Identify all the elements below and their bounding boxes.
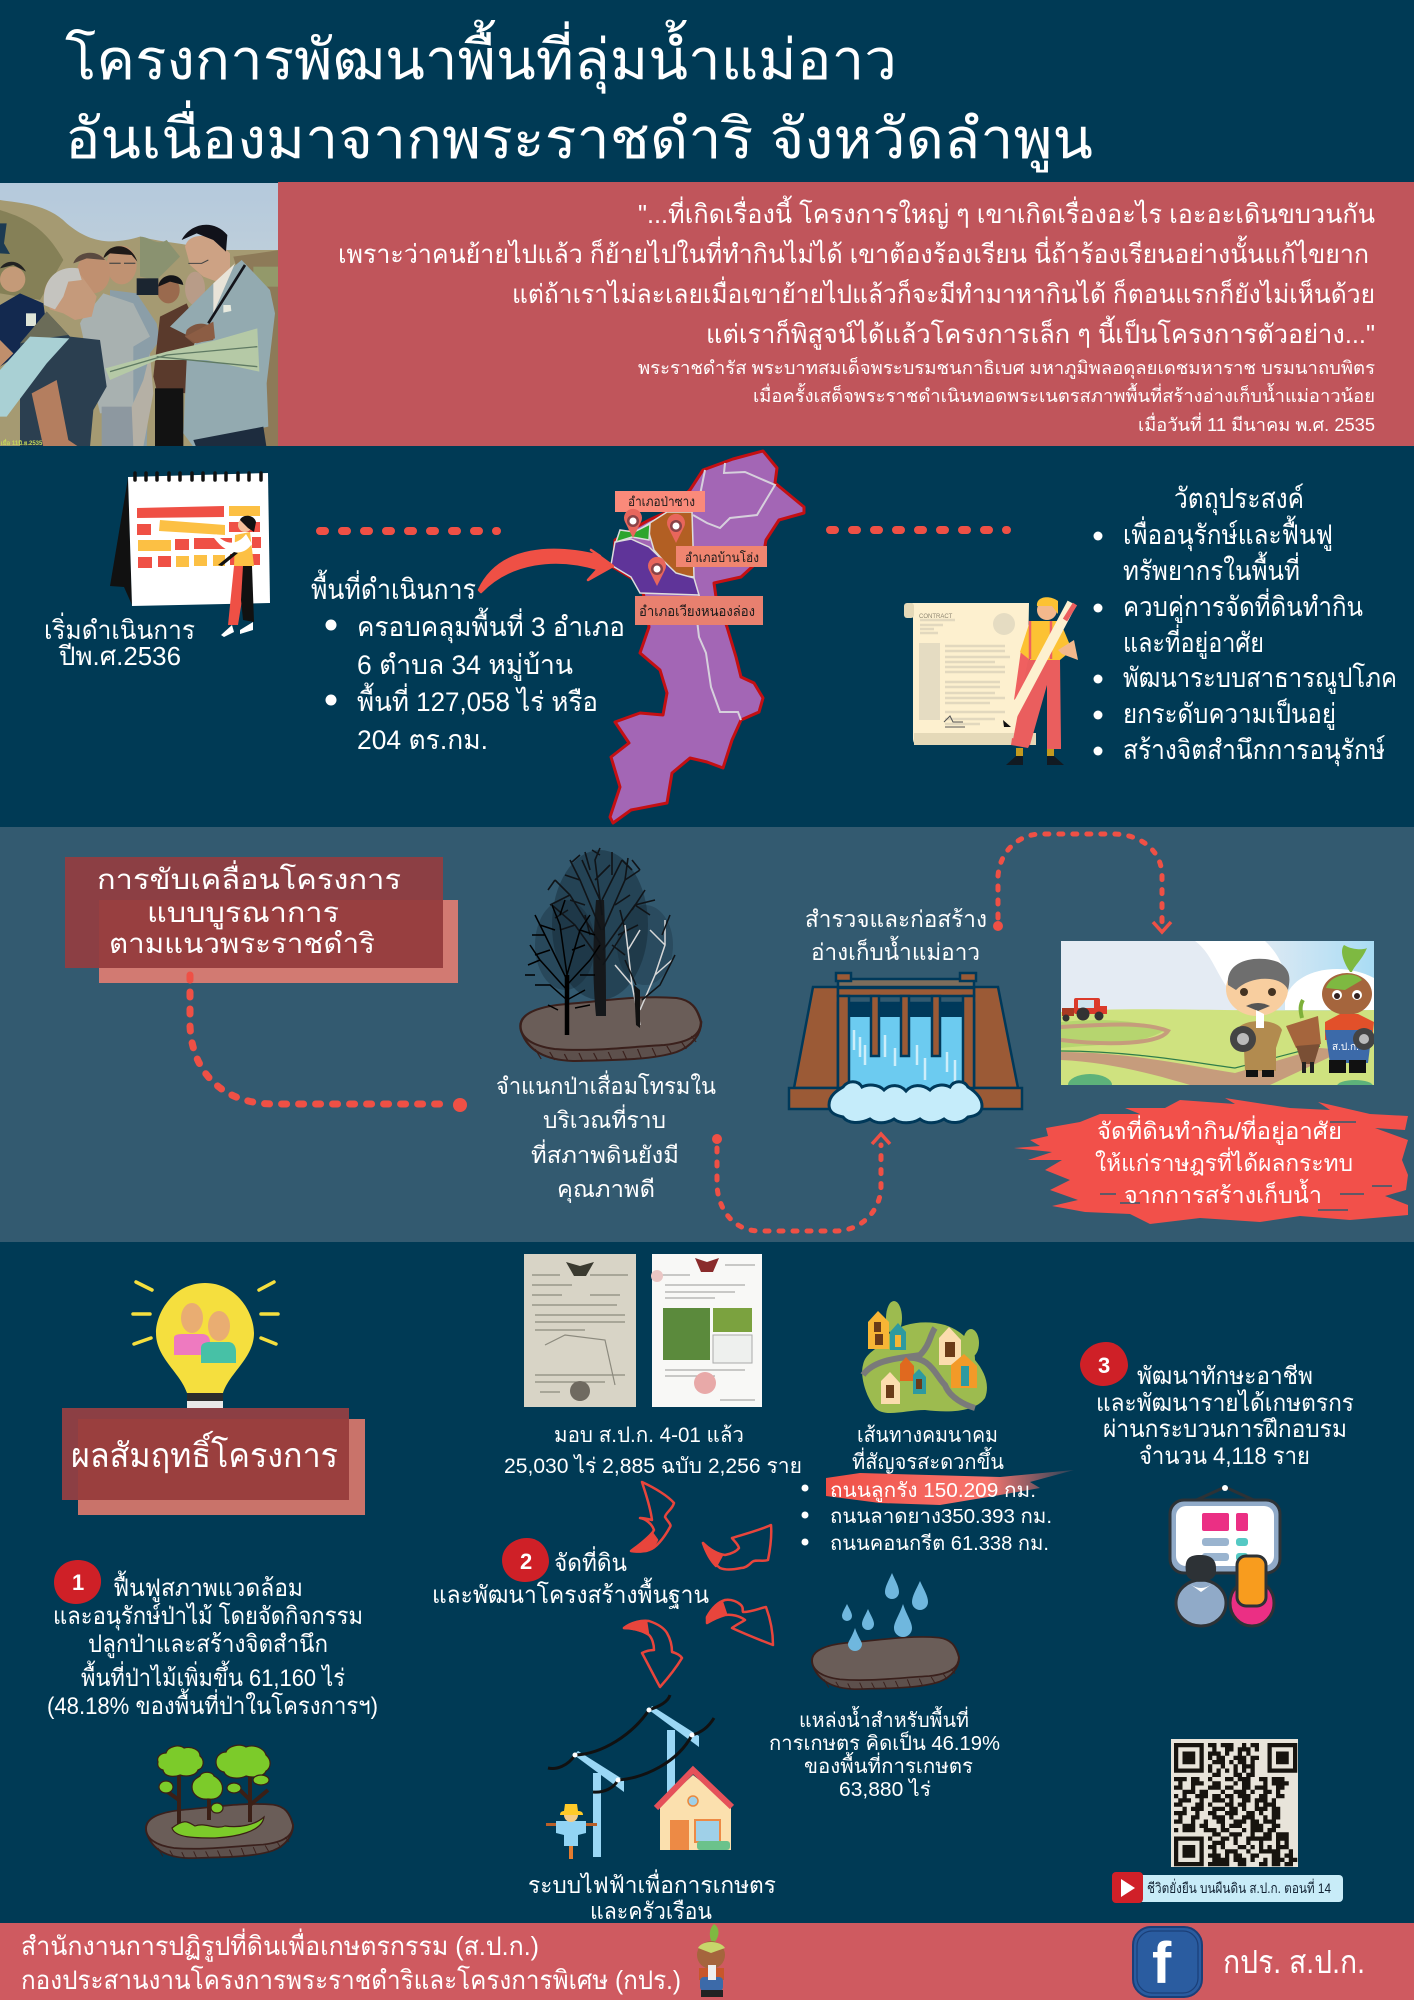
map pins <box>624 509 685 586</box>
arrow: to map <box>479 550 613 592</box>
quote text: เมื่อครั้งเสด็จพระราชดำเนินทอดพระเนตรสภาพพื้นที่สร้างอ่างเก็บน้ำแม่อาวน้อย <box>753 383 1375 406</box>
footer organisation text: กองประสานงานโครงการพระราชดำริและโครงการพิเศษ (กปร.) <box>21 1965 681 1995</box>
image: land allocation cartoon <box>1061 941 1375 1096</box>
photo: the King with officials: เมื่อ 11มิ.ย.2535 <box>1 438 43 447</box>
text: S.P.K. 4-01: มอบ ส.ป.ก. 4-01 แล้ว <box>554 1424 744 1447</box>
text: electricity: ระบบไฟฟ้าเพื่อการเกษตร <box>528 1869 776 1898</box>
map label: Ban Hong: อำเภอบ้านโฮ่ง <box>685 550 759 565</box>
character: mascot <box>1322 945 1375 1073</box>
quote text: เพราะว่าคนย้ายไปแล้ว ก็ย้ายไปในที่ทำกินไม่ได้ เขาต้องร้องเรียน นี่ถ้าร้องเรียนอย่างนั้นแก้ไขยาก <box>338 235 1369 269</box>
arrow: cycle bottom left <box>624 1621 682 1687</box>
result 3: skills: ผ่านกระบวนการฝึกอบรม <box>1103 1416 1347 1443</box>
operating area text: 6 ตำบล 34 หมู่บ้าน <box>357 650 573 681</box>
arrow: cycle bottom right <box>707 1600 773 1645</box>
text: survey and build reservoir <box>805 906 987 965</box>
result 1: restore environment: และอนุรักษ์ป่าไม้ โดยจัดกิจกรรม <box>53 1602 363 1631</box>
brush callout: land allocation <box>1014 1098 1408 1224</box>
text: classify degraded forest: จำแนกป่าเสื่อมโทรมใน <box>496 1070 716 1099</box>
quote text: แต่ถ้าเราไม่ละเลยเมื่อเขาย้ายไปแล้วก็จะมีทำมาหากินได้ ก็ตอนแรกก็ยังไม่เห็นด้วย <box>512 276 1375 309</box>
icon: green trees on soil <box>146 1745 293 1858</box>
footer mascot <box>697 1924 725 1997</box>
map label: Wiang Nong Long: อำเภอเวียงหนองล่อง <box>639 603 755 619</box>
QR code <box>1171 1739 1298 1867</box>
title <box>65 20 1093 173</box>
panel: royal quote band <box>278 182 1414 446</box>
text: survey and build reservoir: สำรวจและก่อสร้าง <box>805 906 987 932</box>
icon: village with roads <box>862 1301 987 1413</box>
objectives: สร้างจิตสำนึกการอนุรักษ์ <box>1123 734 1386 767</box>
brush callout: land allocation: จากการสร้างเก็บน้ำ <box>1124 1179 1322 1208</box>
operating area text <box>311 569 625 755</box>
blue map <box>0 337 69 417</box>
text: classify degraded forest: คุณภาพดี <box>557 1176 655 1203</box>
result 2: land and infrastructure: และพัฒนาโครงสร้างพื้นฐาน <box>432 1577 709 1609</box>
objectives: ควบคู่การจัดที่ดินทำกิน <box>1123 588 1363 623</box>
result 3: skills <box>1080 1342 1354 1470</box>
start date text: เริ่มดำเนินการ <box>44 612 195 645</box>
left man <box>0 267 25 292</box>
facebook logo: f <box>1152 1931 1172 1996</box>
operating area text: พื้นที่ 127,058 ไร่ หรือ <box>357 682 598 717</box>
quote text: แต่เราก็พิสูจน์ได้แล้วโครงการเล็ก ๆ นี้เป็นโครงการตัวอย่าง..." <box>706 315 1375 350</box>
map label: Pa Sang: อำเภอป่าซาง <box>628 494 695 509</box>
text: roads: เส้นทางคมนาคม <box>857 1424 998 1447</box>
background men <box>110 290 160 447</box>
scarecrow <box>546 1804 597 1859</box>
icon: light bulb with people <box>133 1282 278 1408</box>
title: อันเนื่องมาจากพระราชดำริ จังหวัดลำพูน <box>65 100 1093 173</box>
dotted connector left <box>320 527 497 535</box>
heading box: project results: ผลสัมฤทธิ์โครงการ <box>71 1430 338 1475</box>
text: classify degraded forest: บริเวณที่ราบ <box>543 1104 666 1133</box>
footer organisation text: สำนักงานการปฏิรูปที่ดินเพื่อเกษตรกรรม (ส.ป.ก.) <box>21 1928 539 1962</box>
footer band <box>0 1923 1414 2000</box>
quote text: เมื่อวันที่ 11 มีนาคม พ.ศ. 2535 <box>1138 412 1375 435</box>
badge 1: 1 <box>72 1570 84 1595</box>
quote text: "...ที่เกิดเรื่องนี้ โครงการใหญ่ ๆ เขาเกิดเรื่องอะไร เอะอะเดินขบวนกัน <box>638 195 1375 229</box>
dotted arrow: heading to forest <box>190 975 467 1112</box>
result 1: restore environment: ปลูกป่าและสร้างจิตสำนึก <box>88 1631 328 1659</box>
footer office name: กปร. ส.ป.ก. <box>1223 1944 1365 1980</box>
road list: ถนนคอนกรีต 61.338 กม. <box>830 1533 1049 1555</box>
arrow: cycle top left <box>631 1482 674 1552</box>
icon: training board and people <box>1170 1485 1280 1626</box>
badge 2: 2 <box>520 1549 532 1574</box>
icon: water drops on soil <box>812 1573 959 1689</box>
result 1: restore environment: ฟื้นฟูสภาพแวดล้อม <box>113 1570 303 1603</box>
result 1: restore environment: พื้นที่ป่าไม้เพิ่มขึ้น 61,160 ไร่ <box>81 1660 345 1692</box>
text: roads: ที่สัญจรสะดวกขึ้น <box>852 1447 1004 1474</box>
open map <box>105 328 259 380</box>
map: project area <box>610 451 804 823</box>
icon: calendar with person <box>110 473 270 637</box>
dotted connector right <box>830 526 1007 534</box>
icon: contract with man holding pencil: CONTRACT <box>919 614 953 620</box>
icon: contract with man holding pencil <box>904 597 1078 765</box>
heading box: project results <box>62 1408 365 1515</box>
map label: Ban Hong <box>676 546 767 567</box>
tractor <box>1062 998 1107 1022</box>
objectives <box>1094 483 1397 767</box>
badge 2 <box>502 1538 549 1582</box>
text: water source: 63,880 ไร่ <box>839 1778 931 1801</box>
image: land title documents <box>524 1254 762 1407</box>
text: S.P.K. 4-01 <box>504 1424 802 1478</box>
character: seedling <box>1286 1000 1321 1073</box>
text: water source: แหล่งน้ำสำหรับพื้นที่ <box>799 1706 969 1732</box>
text: water source <box>769 1706 1000 1801</box>
text: water source: ของพื้นที่การเกษตร <box>804 1752 973 1778</box>
operating area text: ครอบคลุมพื้นที่ 3 อำเภอ <box>357 607 625 644</box>
dotted arrow: forest to dam <box>712 1134 890 1231</box>
heading box: integrated driving: การขับเคลื่อนโครงการ <box>97 860 401 895</box>
dotted arrow: dam to land <box>993 834 1171 932</box>
front officer <box>44 276 96 320</box>
text: classify degraded forest <box>496 1070 716 1203</box>
video label <box>1112 1872 1343 1903</box>
text: S.P.K. 4-01: 25,030 ไร่ 2,885 ฉบับ 2,256 ราย <box>504 1454 802 1478</box>
badge 1 <box>54 1560 101 1604</box>
result 1: restore environment: (48.18% ของพื้นที่ป่าในโครงการฯ) <box>47 1688 378 1720</box>
brush highlight <box>826 1470 1074 1505</box>
heading box: integrated driving <box>65 857 458 983</box>
icon: dam <box>789 973 1022 1123</box>
map label: Wiang Nong Long <box>635 596 763 625</box>
quote text: พระราชดำรัส พระบาทสมเด็จพระบรมชนกาธิเบศ มหาภูมิพลอดุลยเดชมหาราช บรมนาถบพิตร <box>638 356 1375 379</box>
man with pencil <box>1003 597 1078 765</box>
objectives: ทรัพยากรในพื้นที่ <box>1123 551 1300 586</box>
king <box>185 236 230 282</box>
title: โครงการพัฒนาพื้นที่ลุ่มน้ำแม่อาว <box>65 20 897 94</box>
person pointing at calendar <box>214 516 256 637</box>
start date text <box>44 612 195 671</box>
icon: electricity poles, scarecrow, house <box>546 1695 732 1859</box>
video label: ชีวิตยั่งยืน บนผืนดิน ส.ป.ก. ตอนที่ 14 <box>1147 1879 1331 1896</box>
result 3: skills: จำนวน 4,118 ราย <box>1139 1443 1310 1470</box>
text: electricity: และครัวเรือน <box>590 1898 712 1924</box>
text: water source: การเกษตร คิดเป็น 46.19% <box>769 1730 1000 1755</box>
text: classify degraded forest: ที่สภาพดินยังมี <box>531 1139 679 1168</box>
objectives: ยกระดับความเป็นอยู่ <box>1123 696 1336 730</box>
text: electricity <box>528 1869 776 1924</box>
badge 3: 3 <box>1098 1353 1110 1378</box>
road list <box>802 1480 1052 1555</box>
badge 3 <box>1080 1342 1128 1386</box>
start date text: ปีพ.ศ.2536 <box>58 641 181 671</box>
heading box: integrated driving: ตามแนวพระราชดำริ <box>109 928 375 959</box>
photo: the King with officials <box>0 180 280 450</box>
result 2: land and infrastructure: จัดที่ดิน <box>554 1546 627 1577</box>
result 3: skills: พัฒนาทักษะอาชีพ <box>1137 1363 1313 1390</box>
brush callout: land allocation: จัดที่ดินทำกิน/ที่อยู่อาศัย <box>1097 1115 1342 1145</box>
objectives: และที่อยู่อาศัย <box>1123 624 1264 659</box>
facebook logo <box>1133 1927 1202 1997</box>
result 1: restore environment <box>47 1560 378 1720</box>
character: mascot: ส.ป.ก. <box>1332 1042 1359 1053</box>
panel: integrated project section <box>0 827 1414 1242</box>
heading box: integrated driving: แบบบูรณาการ <box>147 897 339 930</box>
text: roads <box>852 1424 1004 1474</box>
road list: ถนนลาดยาง350.393 กม. <box>830 1506 1052 1528</box>
result 3: skills: และพัฒนารายได้เกษตรกร <box>1096 1389 1354 1417</box>
map label: Pa Sang <box>615 491 705 512</box>
result 2: land and infrastructure <box>432 1538 709 1609</box>
road list: ถนนลูกรัง 150.209 กม. <box>830 1480 1036 1503</box>
house <box>656 1770 732 1850</box>
brush callout: land allocation: ให้แก่ราษฎรที่ได้ผลกระทบ <box>1095 1147 1353 1176</box>
character: officer <box>1226 959 1289 1077</box>
text: survey and build reservoir: อ่างเก็บน้ำแม่อาว <box>811 936 980 965</box>
icon: bare trees on soil <box>520 848 701 1061</box>
objectives: เพื่ออนุรักษ์และฟื้นฟู <box>1123 515 1333 552</box>
operating area text: 204 ตร.กม. <box>357 725 488 755</box>
objectives: วัตถุประสงค์ <box>1174 483 1304 516</box>
footer organisation text <box>21 1928 681 1995</box>
operating area text: พื้นที่ดำเนินการ <box>311 569 476 605</box>
quote text <box>338 195 1375 435</box>
arrow: cycle top right <box>703 1525 771 1570</box>
